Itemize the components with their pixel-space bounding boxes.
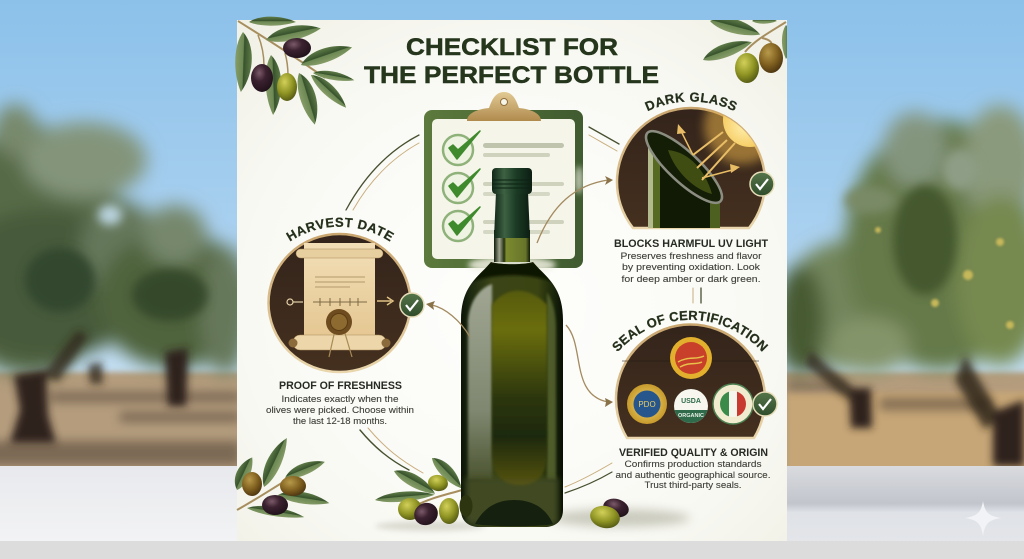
seal: USDA organic: USDA [681, 398, 701, 405]
description: seal of certification: Trust third-party seals. [644, 480, 742, 491]
description: dark glass: for deep amber or dark green. [622, 274, 760, 285]
bottle cap [492, 168, 532, 238]
description: harvest date: olives were picked. Choose within [266, 405, 414, 416]
decoration: bottom-left olive branch [230, 435, 330, 521]
curved heading: dark glass: DARK GLASS [644, 92, 737, 112]
description: dark glass: Preserves freshness and flavor [620, 251, 762, 262]
description: seal of certification: and authentic geographical source. [616, 470, 770, 481]
bottle body [461, 262, 563, 527]
description: seal of certification: Confirms production standards [624, 459, 762, 470]
panel: infographic card [237, 20, 787, 541]
section: dark glass [614, 92, 775, 285]
check badge [400, 293, 424, 317]
section: harvest date [266, 218, 425, 427]
curved heading: seal of certification: SEAL OF CERTIFICATION [612, 310, 768, 352]
oil tint [492, 291, 547, 485]
clipboard with checklist [424, 92, 583, 274]
seal: USDA organic: ORGANIC [678, 413, 704, 419]
description: dark glass [620, 251, 762, 285]
small olive behind glass [460, 495, 472, 517]
subheading: verified quality and origin: VERIFIED QUALITY & ORIGIN [619, 447, 768, 459]
glass highlights [464, 262, 560, 524]
seal: USDA organic [674, 389, 708, 423]
harvest circle illustration [268, 234, 410, 372]
description: harvest date [266, 394, 414, 427]
seal: red and gold PGI [670, 337, 712, 379]
decoration: top-right olive branch [703, 20, 787, 83]
arrow: bottle to dark glass [537, 176, 613, 243]
check badge [750, 172, 774, 196]
seal: PDO: PDO [638, 400, 656, 409]
dark glass illustration [616, 106, 766, 230]
olive bottle [460, 168, 563, 527]
checklist item 1 [443, 131, 564, 165]
decoration: top-left olive branch [234, 17, 355, 127]
arrow: bottle to harvest date [426, 301, 470, 337]
icon: sparkle watermark [965, 501, 1001, 536]
description: harvest date: Indicates exactly when the [282, 394, 398, 405]
seal illustration [616, 325, 765, 438]
description: dark glass: by preventing oxidation. Look [622, 262, 760, 273]
clipboard clasp [467, 92, 541, 121]
subheading: proof of freshness: PROOF OF FRESHNESS [279, 380, 402, 392]
subheading: blocks harmful UV light: BLOCKS HARMFUL UV LIGHT [614, 238, 768, 250]
neck glass [494, 230, 530, 262]
title: THE PERFECT BOTTLE [364, 62, 659, 89]
description: harvest date: the last 12-18 months. [293, 416, 387, 427]
seal: Italian flag [713, 384, 753, 424]
connector lines [346, 127, 701, 493]
checklist item 2 [443, 169, 564, 203]
table surface [0, 466, 1024, 559]
description: seal of certification [616, 459, 770, 491]
curved heading: harvest date: HARVEST DATE [286, 218, 394, 242]
checklist item 3 [443, 207, 564, 241]
title [364, 34, 659, 89]
seal: PDO [627, 384, 667, 424]
arrow: bottle to seal of certification [566, 325, 613, 407]
title: CHECKLIST FOR [406, 34, 618, 61]
section: seal of certification [612, 310, 778, 491]
base shadow [475, 500, 553, 526]
decoration: loose olives [588, 496, 631, 531]
check badge [753, 392, 777, 416]
decoration: bottom-center olive branch [374, 453, 466, 529]
